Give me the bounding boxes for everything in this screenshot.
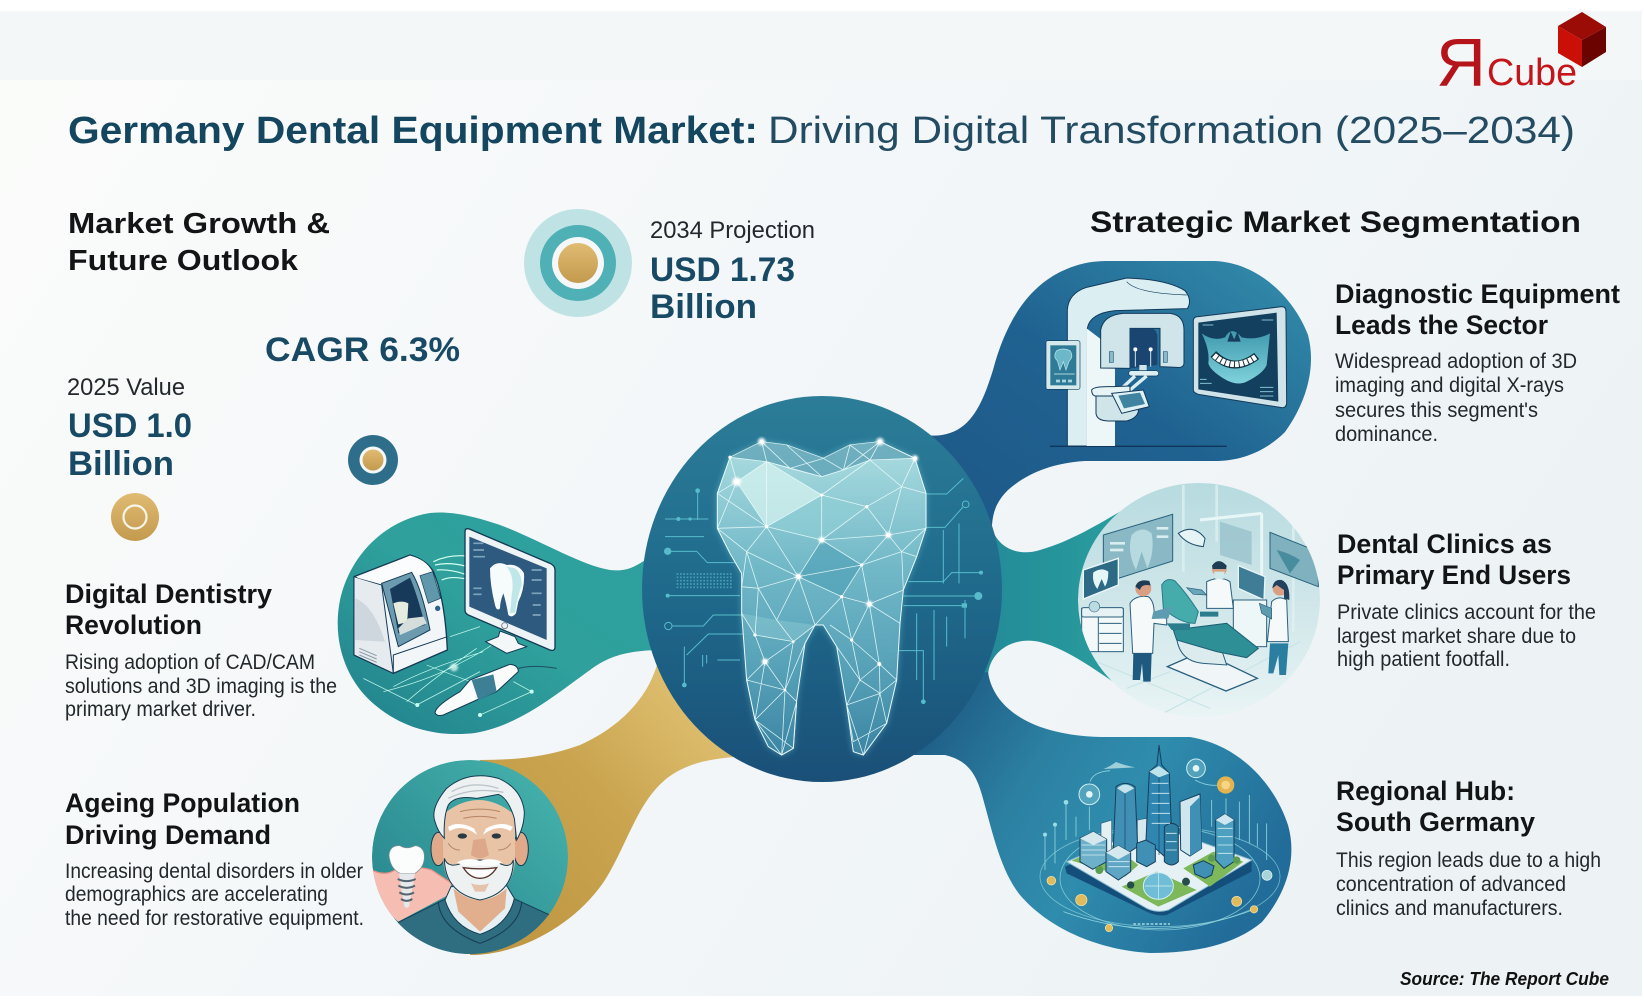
heading: market growth: Market Growth & (68, 208, 330, 240)
stat: 2025 value (67, 374, 192, 483)
logo: RCube: Я (1436, 25, 1486, 101)
beard (444, 858, 513, 900)
connector: diagnostic blob (880, 261, 1311, 560)
stat: 2034 projection: 2034 Projection (650, 217, 815, 244)
stat: 2025 value: Billion (68, 445, 174, 483)
room elements (1183, 485, 1293, 632)
connector: clinic arm (900, 500, 1140, 700)
text: diagnostic equipment: Diagnostic Equipment (1335, 279, 1620, 309)
collar (445, 886, 514, 934)
sweater (398, 898, 549, 954)
marker: midpoint (348, 435, 398, 485)
text: ageing population (65, 788, 364, 930)
assistant right (1267, 598, 1288, 642)
text: diagnostic equipment: secures this segment's (1335, 399, 1538, 422)
stat: 2034 projection: USD 1.73 (650, 251, 795, 289)
text: ageing population: the need for restorative equipment. (65, 907, 364, 930)
stat: CAGR: CAGR 6.3% (265, 331, 460, 369)
text: ageing population: Driving Demand (65, 820, 271, 850)
mesh node glows (732, 438, 918, 665)
header band (0, 11, 1642, 80)
text: digital dentistry (65, 579, 337, 721)
illustration: regional city (1040, 745, 1280, 932)
text: regional hub: South Germany (1336, 807, 1535, 837)
logo: RCube: Cube (1487, 52, 1577, 94)
text: ageing population: Ageing Population (65, 788, 300, 818)
text: dental clinics: Private clinics account for the (1337, 601, 1596, 624)
dentist back (1207, 578, 1233, 608)
title: Germany Dental Equipment Market: (68, 110, 758, 152)
intraoral scanner (518, 666, 557, 668)
text: regional hub: concentration of advanced (1336, 873, 1566, 896)
title: Driving Digital Transformation (2025–2034) (768, 110, 1575, 152)
text: digital dentistry: primary market driver. (65, 698, 256, 721)
tooth mesh (717, 438, 926, 755)
text: regional hub (1336, 776, 1601, 920)
text: dental clinics: high patient footfall. (1337, 648, 1510, 671)
illustration: dental clinic (1078, 483, 1320, 717)
logo: RCube (1436, 12, 1606, 101)
circuit lines (664, 478, 983, 704)
buildings (1101, 820, 1112, 853)
heading: market growth: Future Outlook (68, 245, 299, 277)
illustration: ageing patient (372, 760, 568, 954)
text: digital dentistry: Rising adoption of CAD/CAM (65, 651, 315, 674)
nose and eyes (471, 838, 489, 858)
text: ageing population: demographics are accelerating (65, 883, 328, 906)
connector: digital blob (338, 512, 665, 734)
illustration: digital dentistry (354, 529, 557, 717)
text: digital dentistry: solutions and 3D imaging is the (65, 675, 337, 698)
text: regional hub: Regional Hub: (1336, 776, 1515, 806)
connector: gold arm (470, 650, 745, 955)
illustration: diagnostic equipment (1046, 278, 1287, 446)
text: ageing population: Increasing dental disorders in older (65, 860, 363, 883)
text: diagnostic equipment: Widespread adoption of 3D (1335, 350, 1577, 373)
stat: 2034 projection: Billion (650, 288, 757, 326)
text: diagnostic equipment: dominance. (1335, 423, 1438, 446)
dental chair (1167, 652, 1257, 691)
gum and implant (372, 867, 452, 922)
network nodes (1079, 759, 1205, 805)
marker: 2025 gold (111, 493, 159, 541)
heading: segmentation: Strategic Market Segmentation (1090, 206, 1581, 239)
hair (434, 776, 524, 840)
globe (1143, 873, 1173, 899)
text: dental clinics (1337, 529, 1596, 671)
stat: 2025 value: 2025 Value (67, 374, 185, 401)
central circle with tooth (642, 396, 1002, 782)
text: regional hub: clinics and manufacturers. (1336, 897, 1563, 920)
floor lines (1097, 642, 1300, 715)
stat: 2034 projection (650, 217, 815, 326)
text: dental clinics: Primary End Users (1337, 560, 1571, 590)
source note: Source: The Report Cube (1400, 969, 1609, 989)
tooth glow (717, 442, 926, 755)
mesh nodes (728, 440, 917, 691)
ears (431, 832, 446, 866)
monitor (465, 529, 555, 650)
dentist left (1130, 596, 1167, 653)
text: diagnostic equipment: imaging and digital X-rays (1335, 374, 1564, 397)
text: dental clinics: largest market share due to (1337, 625, 1576, 648)
connector: regional blob (860, 672, 1291, 953)
text: regional hub: This region leads due to a high (1336, 849, 1601, 872)
heading: market growth (68, 208, 330, 277)
text: diagnostic equipment (1335, 279, 1620, 446)
marker: 2034 target (524, 209, 632, 317)
text: digital dentistry: Digital Dentistry (65, 579, 272, 609)
text: digital dentistry: Revolution (65, 610, 202, 640)
stat: 2025 value: USD 1.0 (68, 407, 192, 445)
text: dental clinics: Dental Clinics as (1337, 529, 1552, 559)
text: diagnostic equipment: Leads the Sector (1335, 310, 1548, 340)
face (442, 800, 515, 900)
milling unit (354, 555, 447, 673)
